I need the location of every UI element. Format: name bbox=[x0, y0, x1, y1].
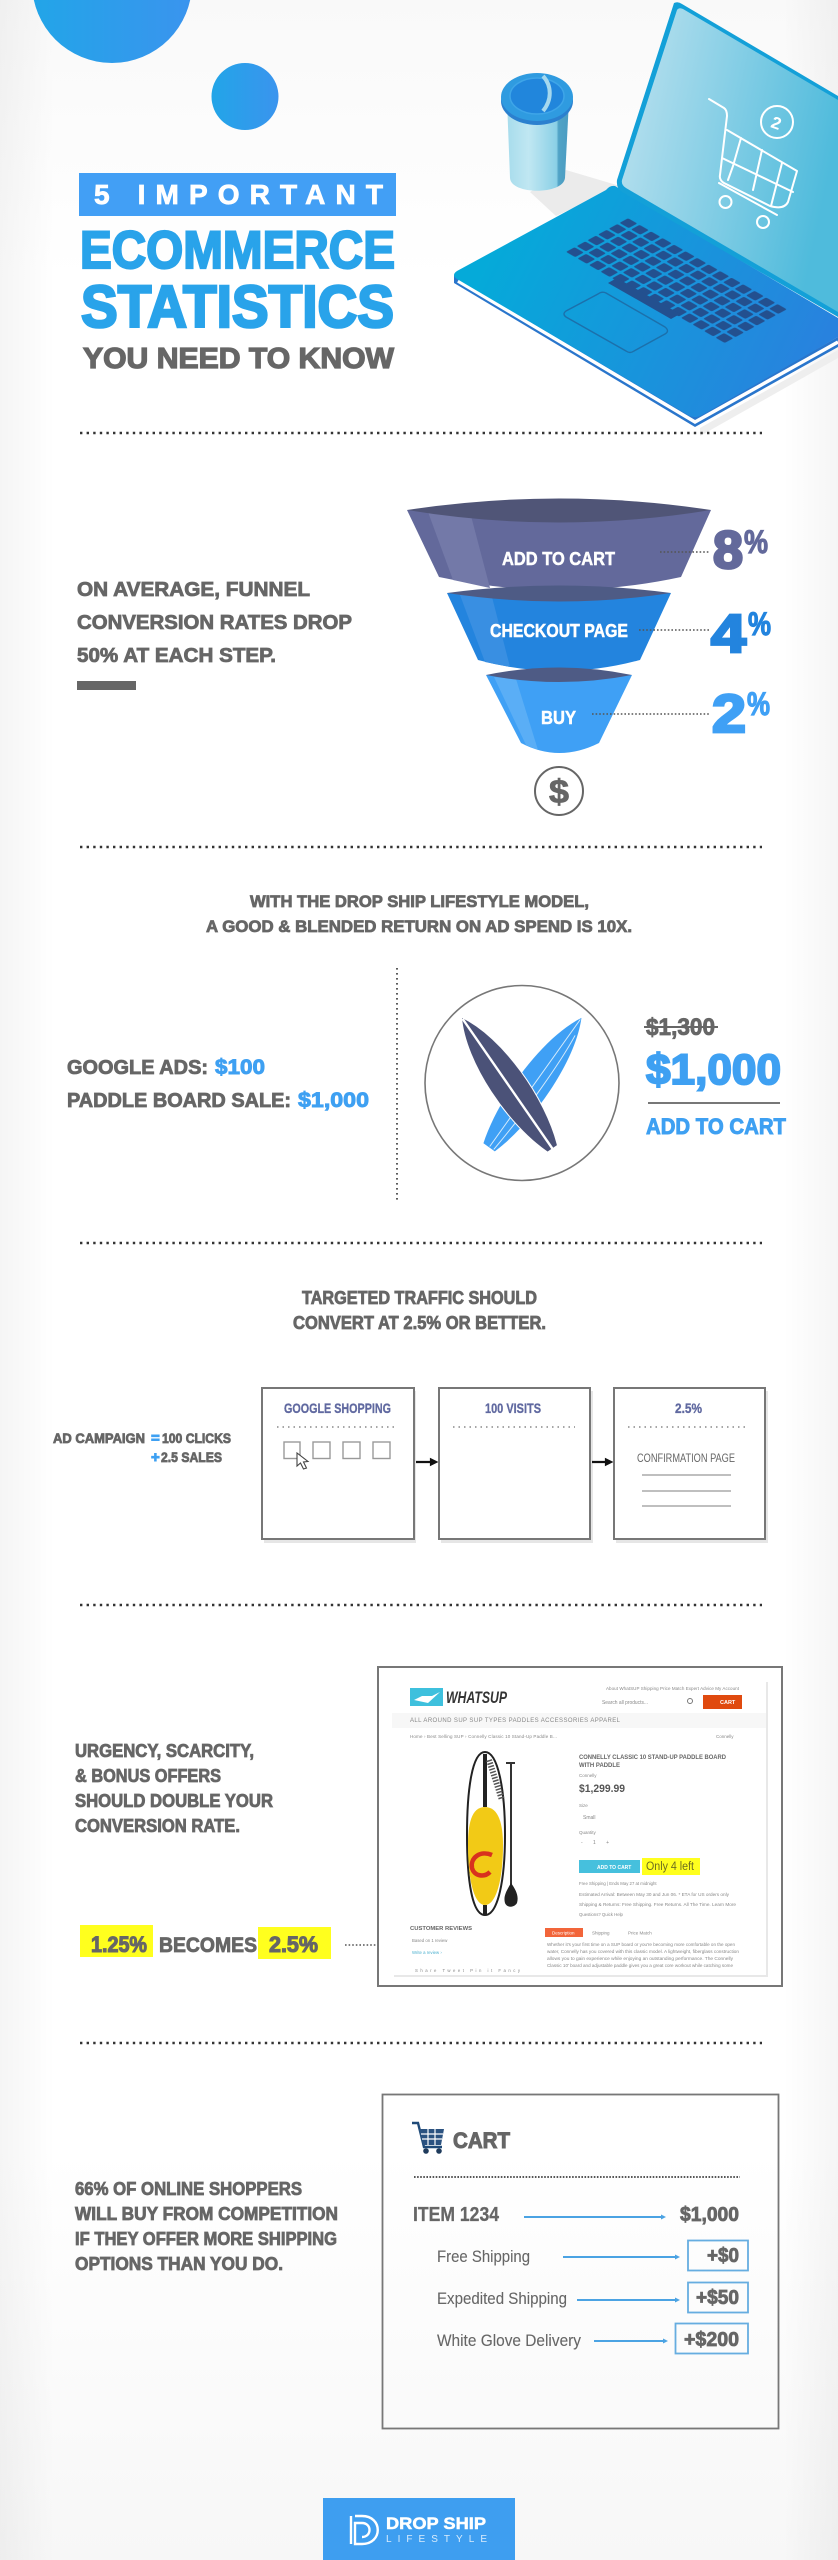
description tabs: Description bbox=[552, 1930, 575, 1936]
funnel stat: 8% bbox=[660, 521, 768, 580]
store logo bbox=[410, 1688, 507, 1707]
store header links: ALL AROUND SUP SUP TYPES PADDLES ACCESSORIES APPAREL bbox=[410, 1718, 621, 1724]
footer logo: drop ship lifestyle bbox=[323, 2498, 515, 2560]
paddle board image bbox=[467, 1752, 518, 1915]
heading: A GOOD & BLENDED RETURN ON AD SPEND IS 10X. bbox=[206, 917, 632, 936]
shipping option: free shipping bbox=[437, 2240, 748, 2270]
page card: google shopping: GOOGLE SHOPPING bbox=[284, 1400, 391, 1416]
urgency text: CONVERSION RATE. bbox=[75, 1816, 240, 1836]
blue surfboard bbox=[475, 1008, 595, 1157]
product details: - 1 + bbox=[581, 1840, 609, 1846]
cart icon on screen bbox=[709, 99, 797, 228]
shipping text: 66% OF ONLINE SHOPPERS bbox=[75, 2179, 302, 2199]
line item: $1,000 bbox=[680, 2204, 739, 2226]
section: funnel conversion bbox=[77, 498, 771, 815]
funnel tier 2: checkout page bbox=[447, 586, 671, 671]
store logo: WHATSUP bbox=[446, 1688, 507, 1707]
funnel stat: 2%: 2 bbox=[712, 684, 746, 744]
ad spend figures: PADDLE BOARD SALE: bbox=[67, 1090, 291, 1112]
heading: WITH THE DROP SHIP LIFESTYLE MODEL, bbox=[250, 892, 589, 911]
cart heading: CART bbox=[453, 2128, 511, 2153]
ad campaign equation: = bbox=[151, 1430, 160, 1447]
shipping option: expedited shipping: +$50 bbox=[696, 2287, 739, 2309]
subtitle: YOU NEED TO KNOW bbox=[83, 343, 395, 375]
funnel tier 1: add to cart: ADD TO CART bbox=[502, 548, 616, 569]
product details: Questions? Quick Help bbox=[579, 1912, 624, 1917]
title: ecommerce statistics: ECOMMERCE bbox=[80, 221, 395, 280]
conversion callout: 1.25% bbox=[91, 1932, 147, 1957]
line item bbox=[413, 2204, 739, 2226]
reviews block bbox=[410, 1926, 521, 1973]
shipping text: IF THEY OFFER MORE SHIPPING bbox=[75, 2229, 337, 2249]
section: urgency and scarcity bbox=[75, 1667, 782, 1986]
reviews block: Share Tweet Pin it Fancy bbox=[415, 1968, 521, 1973]
price box bbox=[644, 1014, 787, 1139]
footer logo: drop ship lifestyle: LIFESTYLE bbox=[386, 2534, 487, 2545]
ad campaign equation: 2.5 SALES bbox=[161, 1449, 222, 1465]
funnel stat: 2%: % bbox=[747, 686, 770, 722]
divider bbox=[80, 1242, 762, 1244]
funnel stat: 4%: % bbox=[748, 606, 771, 642]
ad spend figures: GOOGLE ADS: bbox=[67, 1057, 208, 1079]
conversion callout: 2.5% bbox=[269, 1932, 318, 1957]
divider bbox=[80, 846, 762, 848]
decorative small circle bbox=[212, 63, 278, 130]
funnel stat: 4% bbox=[639, 604, 771, 664]
product details: CONNELLY CLASSIC 10 STAND-UP PADDLE BOARD bbox=[579, 1754, 727, 1761]
funnel text: 50% AT EACH STEP. bbox=[77, 645, 276, 667]
store header links: Home › Best Selling SUP › Connelly Classic 10 Stand-Up Paddle B... bbox=[410, 1734, 557, 1739]
shipping option: white glove delivery bbox=[437, 2324, 748, 2354]
product details: Free Shipping | Ends May 27 at midnight bbox=[579, 1881, 657, 1886]
funnel stat: 8%: 8 bbox=[713, 521, 743, 580]
title: ecommerce statistics: STATISTICS bbox=[81, 274, 394, 340]
urgency text bbox=[75, 1741, 273, 1836]
product details: $1,299.99 bbox=[579, 1783, 625, 1795]
store header links: CART bbox=[720, 1700, 736, 1706]
logo mark bbox=[351, 2516, 378, 2544]
product details: WITH PADDLE bbox=[579, 1762, 620, 1769]
funnel stat: 8%: % bbox=[744, 524, 768, 560]
illustration: coffee cup bbox=[501, 73, 620, 216]
shipping option: free shipping: Free Shipping bbox=[437, 2247, 530, 2266]
reviews block: Write a review › bbox=[412, 1950, 442, 1955]
store header links bbox=[410, 1686, 742, 1739]
trackpad bbox=[564, 292, 668, 352]
product details: Connelly bbox=[579, 1773, 597, 1778]
description tabs: allows you to gain experience while enjoying an outstanding performance. The Connelly bbox=[547, 1956, 734, 1961]
heading bbox=[293, 1288, 546, 1333]
illustration: laptop bbox=[454, 2, 838, 436]
arrow bbox=[416, 1460, 436, 1464]
reviews block: Based on 1 review bbox=[412, 1938, 448, 1943]
cart panel bbox=[382, 2094, 778, 2428]
funnel text: CONVERSION RATES DROP bbox=[77, 612, 352, 634]
ad spend figures bbox=[67, 1056, 369, 1112]
product details: Quantity bbox=[579, 1830, 597, 1835]
product details: Shipping & Returns: Free Shipping. Free Returns. All The Time. Learn More bbox=[579, 1902, 737, 1907]
line item: ITEM 1234 bbox=[413, 2204, 500, 2226]
description tabs bbox=[545, 1928, 740, 1968]
title badge: 5 important bbox=[79, 173, 396, 216]
icon: dollar coin bbox=[535, 767, 583, 815]
shipping text bbox=[75, 2179, 338, 2274]
urgency text: SHOULD DOUBLE YOUR bbox=[75, 1791, 273, 1811]
urgency text: & BONUS OFFERS bbox=[75, 1766, 221, 1786]
arrow bbox=[592, 1460, 611, 1464]
funnel text bbox=[77, 579, 352, 690]
icon: dollar coin: $ bbox=[549, 773, 569, 810]
reviews block: CUSTOMER REVIEWS bbox=[410, 1926, 472, 1932]
price box: $1,300 bbox=[646, 1014, 715, 1041]
section: targeted traffic bbox=[53, 1288, 768, 1543]
keyboard bbox=[564, 217, 789, 344]
shipping option: expedited shipping: Expedited Shipping bbox=[437, 2289, 567, 2308]
laptop screen bbox=[617, 2, 838, 317]
description tabs: Shipping bbox=[592, 1930, 610, 1936]
heading: CONVERT AT 2.5% OR BETTER. bbox=[293, 1313, 546, 1333]
heading: TARGETED TRAFFIC SHOULD bbox=[302, 1288, 537, 1308]
store header links: Connelly bbox=[716, 1734, 734, 1739]
page card: 100 visits: 100 VISITS bbox=[485, 1400, 541, 1416]
section: shipping options bbox=[75, 2094, 778, 2428]
funnel stat: 2% bbox=[592, 684, 770, 744]
page card: google shopping bbox=[262, 1388, 416, 1543]
surfboards in circle bbox=[425, 986, 619, 1180]
description tabs: Whether it's your first time on a SUP board or you're becoming more comfortable on the open bbox=[547, 1942, 736, 1947]
price box: ADD TO CART bbox=[646, 1114, 787, 1139]
icon: shopping cart bbox=[412, 2123, 444, 2154]
product details: Small bbox=[583, 1815, 596, 1821]
dark surfboard bbox=[447, 1007, 567, 1159]
page card: confirmation page bbox=[614, 1388, 768, 1543]
ad campaign equation bbox=[53, 1430, 231, 1466]
store header links: About WhatSUP Shipping Price Match Expert Advice My Account bbox=[606, 1686, 740, 1691]
shipping option: white glove delivery: White Glove Delivery bbox=[437, 2331, 581, 2350]
header section bbox=[32, 0, 838, 436]
description tabs: Price Match bbox=[628, 1930, 652, 1936]
product details: Only 4 left bbox=[646, 1861, 695, 1873]
divider bbox=[80, 432, 762, 434]
funnel tier 3: buy: BUY bbox=[541, 707, 577, 728]
ad spend figures: $100 bbox=[215, 1056, 265, 1079]
shipping text: OPTIONS THAN YOU DO. bbox=[75, 2254, 283, 2274]
footer logo: drop ship lifestyle: DROP SHIP bbox=[386, 2514, 486, 2533]
price box: $1,000 bbox=[646, 1046, 781, 1094]
title: ecommerce statistics bbox=[80, 221, 395, 340]
title badge: 5 important: 5 IMPORTANT bbox=[94, 179, 383, 210]
page card: 100 visits bbox=[439, 1388, 593, 1543]
funnel text: ON AVERAGE, FUNNEL bbox=[77, 579, 310, 601]
funnel tier 3: buy bbox=[486, 668, 632, 753]
funnel tier 1: add to cart bbox=[407, 498, 711, 590]
icon: mouse cursor bbox=[297, 1453, 308, 1469]
description tabs: water, Connelly has you covered with this classic model. A lightweight, fiberglass construction bbox=[547, 1949, 740, 1954]
page card: confirmation page: CONFIRMATION PAGE bbox=[637, 1451, 735, 1465]
product details: Size bbox=[579, 1803, 588, 1808]
heading bbox=[206, 892, 632, 936]
ad campaign equation: AD CAMPAIGN bbox=[53, 1430, 145, 1446]
shipping text: WILL BUY FROM COMPETITION bbox=[75, 2204, 338, 2224]
store header links: Search all products... bbox=[602, 1700, 648, 1706]
shipping option: free shipping: +$0 bbox=[707, 2245, 739, 2267]
decorative large circle bbox=[32, 0, 192, 63]
funnel graphic bbox=[407, 498, 711, 753]
conversion callout: BECOMES bbox=[159, 1934, 257, 1957]
product page screenshot bbox=[378, 1667, 782, 1986]
ad campaign equation: 100 CLICKS bbox=[162, 1430, 231, 1446]
product details: ADD TO CART bbox=[597, 1865, 631, 1871]
product details bbox=[579, 1754, 737, 1917]
cart icon on screen: 2 bbox=[769, 113, 784, 134]
description tabs: Classic 10' board and adjustable paddle gives you a great core workout while catching some bbox=[547, 1963, 734, 1968]
ad campaign equation: + bbox=[151, 1449, 160, 1466]
divider bbox=[80, 2042, 762, 2044]
funnel tier 2: checkout page: CHECKOUT PAGE bbox=[490, 620, 628, 641]
page card: confirmation page: 2.5% bbox=[675, 1400, 702, 1416]
conversion callout bbox=[80, 1925, 331, 1959]
ad spend figures: $1,000 bbox=[298, 1089, 369, 1112]
product details: Estimated Arrival: Between May 30 and Jun 06. * ETA for US orders only bbox=[579, 1892, 730, 1897]
shipping option: expedited shipping bbox=[437, 2282, 748, 2312]
shipping option: white glove delivery: +$200 bbox=[684, 2329, 739, 2351]
funnel stat: 4%: 4 bbox=[711, 604, 746, 664]
section: return on ad spend bbox=[67, 892, 787, 1203]
urgency text: URGENCY, SCARCITY, bbox=[75, 1741, 254, 1761]
divider bbox=[80, 1604, 762, 1606]
